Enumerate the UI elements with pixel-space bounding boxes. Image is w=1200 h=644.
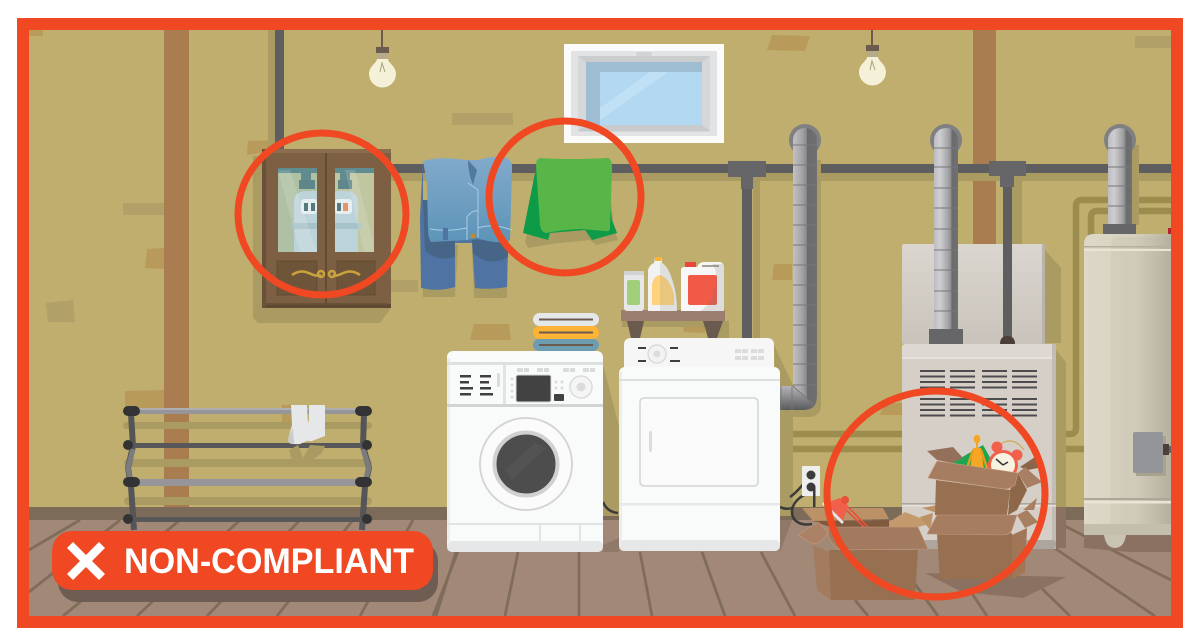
jar xyxy=(624,273,644,311)
non-compliant badge xyxy=(52,531,438,602)
light bulb: left xyxy=(369,30,396,88)
jeans hanging on pipe xyxy=(420,157,512,298)
washer dryer floor shadows xyxy=(603,520,792,552)
water heater xyxy=(1084,124,1171,552)
drying rack xyxy=(123,405,372,530)
washer and dryer shadows xyxy=(603,345,793,516)
baseboard xyxy=(29,507,1171,520)
washer door xyxy=(480,418,572,510)
socks xyxy=(288,405,325,460)
red highlight circle: gas meter cabinet xyxy=(238,133,406,295)
shelf with laundry products xyxy=(621,257,729,338)
dryer vent T fitting and gas line xyxy=(728,161,766,340)
furnace T fitting and gas line xyxy=(1012,176,1022,244)
red highlight circle: boxes in front of furnace xyxy=(827,391,1045,597)
structural wood posts xyxy=(164,30,996,516)
cardboard boxes xyxy=(798,435,1066,600)
badge shadow xyxy=(58,541,438,602)
gas meter cabinet xyxy=(253,149,391,323)
jug xyxy=(681,262,724,311)
folded jeans top xyxy=(423,157,512,242)
lower door panels xyxy=(277,261,317,295)
badge background xyxy=(52,531,433,590)
dryer xyxy=(619,338,780,551)
cabinet body xyxy=(262,149,391,308)
rack bars xyxy=(138,408,356,414)
rack shadows xyxy=(123,422,372,505)
dark vertical pipe with shadow xyxy=(268,30,284,152)
furnace upper cabinet xyxy=(902,244,1045,344)
wall conduits xyxy=(600,200,1171,449)
dryer vent pipe xyxy=(780,124,821,417)
red highlight circle: green cloth on pipe xyxy=(489,121,641,273)
stacked boxes xyxy=(920,435,1042,579)
box contents: toy and alarm clock xyxy=(952,435,1024,480)
floor shadow under boxes xyxy=(925,573,1066,598)
rack end caps xyxy=(123,406,372,524)
door handles xyxy=(292,271,360,277)
furnace lower cabinet xyxy=(902,344,1056,549)
jeans shadow xyxy=(421,240,508,298)
badge label: NON-COMPLIANT xyxy=(124,542,414,581)
electrical outlet xyxy=(802,466,820,507)
light bulb: right xyxy=(859,30,886,86)
jeans legs xyxy=(420,160,508,290)
power cords xyxy=(603,478,812,524)
desk lamp xyxy=(822,496,868,527)
left open box with lamp xyxy=(798,496,933,600)
shelf xyxy=(621,310,725,321)
shelf shadow xyxy=(622,321,729,338)
furnace shadow xyxy=(1045,250,1061,343)
folded towels xyxy=(533,313,599,351)
floor plank lines xyxy=(29,520,1171,616)
dryer controls xyxy=(648,345,666,363)
furnace louvers xyxy=(920,371,1037,416)
furnace xyxy=(902,124,1066,549)
green cloth on pipe xyxy=(523,158,618,248)
dryer door xyxy=(640,398,758,486)
water heater floor shadow xyxy=(1084,530,1171,552)
window xyxy=(564,44,724,143)
rack legs xyxy=(128,414,369,530)
horizontal gas pipe xyxy=(390,164,1171,181)
icon: white X xyxy=(67,542,105,580)
background: wall xyxy=(29,30,1171,516)
washing machine xyxy=(447,351,603,552)
thermostat control box xyxy=(1136,436,1166,476)
floor xyxy=(29,520,1171,616)
detergent bottle xyxy=(648,257,677,311)
washer controls xyxy=(460,375,493,396)
glass panes with meter xyxy=(278,168,374,252)
wall brick patches xyxy=(29,30,1171,425)
furnace vent pipe xyxy=(930,124,962,156)
cabinet shadow xyxy=(253,156,391,323)
